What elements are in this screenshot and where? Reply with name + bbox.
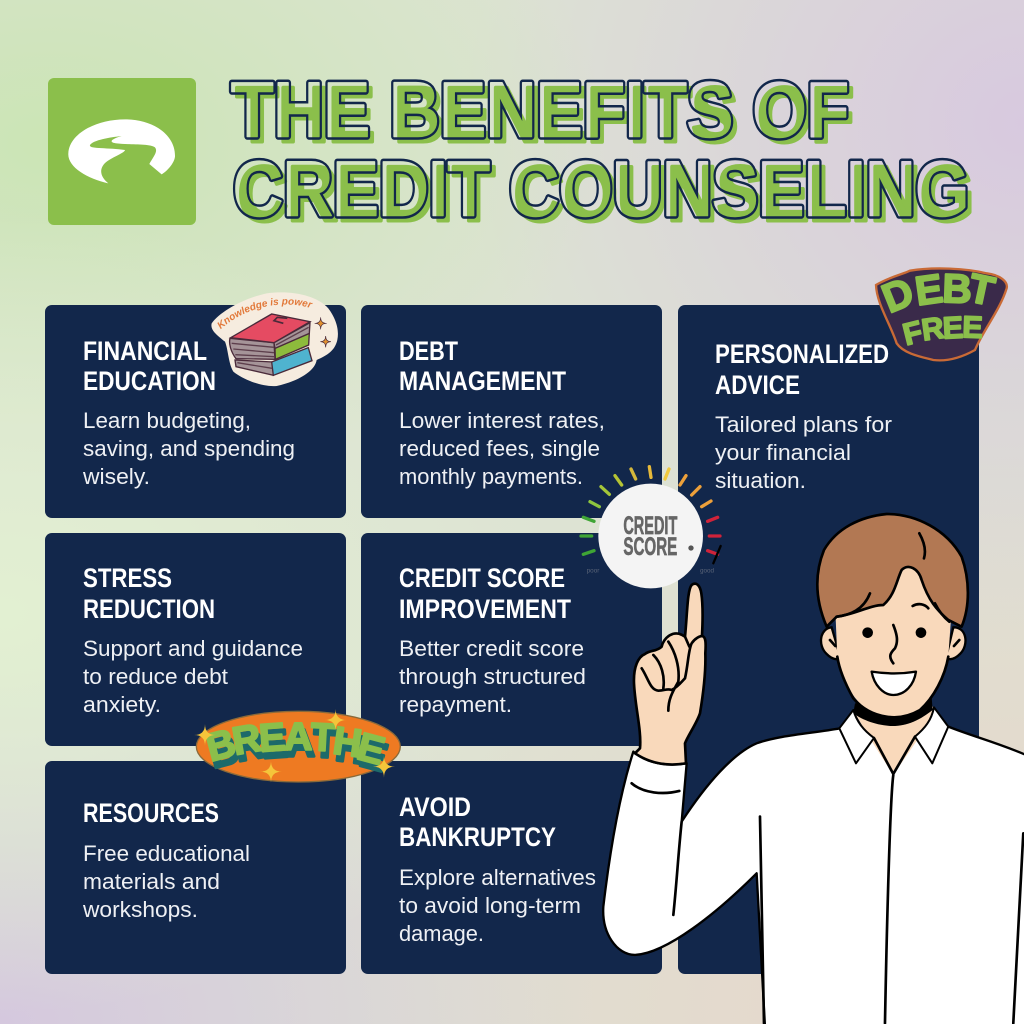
heading: avoid bankruptcy: BANKRUPTCY bbox=[399, 822, 556, 852]
body: credit score improvement: Better credit score bbox=[399, 636, 584, 661]
body: financial education: wisely. bbox=[82, 464, 150, 489]
neck shadow bbox=[853, 697, 933, 726]
mouth bbox=[872, 672, 916, 695]
heading: debt management: MANAGEMENT bbox=[399, 366, 566, 396]
ear lines bbox=[830, 640, 959, 646]
panel: stress reduction bbox=[45, 533, 346, 746]
shirt seams bbox=[632, 737, 1023, 1023]
heading: stress reduction bbox=[83, 563, 215, 624]
gauge: credit score badge: CREDIT bbox=[623, 513, 677, 540]
panel: resources bbox=[45, 761, 346, 974]
body: debt management: reduced fees, single bbox=[399, 436, 600, 461]
title bbox=[228, 78, 972, 224]
body: avoid bankruptcy: damage. bbox=[399, 921, 484, 946]
gauge: credit score badge: SCORE bbox=[623, 534, 677, 561]
body: personalized advice: your financial bbox=[715, 440, 851, 465]
heading: personalized advice: ADVICE bbox=[715, 370, 800, 400]
body: debt management: Lower interest rates, bbox=[399, 408, 605, 433]
body: credit score improvement: through structured bbox=[399, 664, 586, 689]
body: financial education: Learn budgeting, bbox=[83, 408, 251, 433]
hand bbox=[634, 584, 706, 765]
body: financial education bbox=[82, 408, 295, 489]
panel: avoid bankruptcy bbox=[361, 761, 662, 974]
panel: financial education bbox=[45, 305, 346, 518]
heading: financial education: FINANCIAL bbox=[83, 336, 207, 366]
gauge: credit score badge bbox=[581, 467, 721, 588]
shirt and raised arm bbox=[603, 727, 1024, 1024]
body: avoid bankruptcy: to avoid long-term bbox=[399, 893, 581, 918]
neck bbox=[855, 707, 933, 775]
sticker: breathe: BREATHE bbox=[202, 715, 389, 774]
gauge: credit score badge: good bbox=[700, 568, 715, 575]
heading: avoid bankruptcy: AVOID bbox=[399, 792, 471, 822]
sticker: debt free: FREE bbox=[899, 310, 983, 352]
heading: credit score improvement: CREDIT SCORE bbox=[399, 563, 565, 593]
hair strand bbox=[837, 533, 949, 622]
panel: credit score improvement bbox=[361, 533, 662, 746]
heading: stress reduction: STRESS bbox=[83, 563, 172, 593]
body: personalized advice bbox=[715, 412, 892, 493]
heading: financial education bbox=[83, 336, 216, 396]
body: resources: materials and bbox=[83, 869, 220, 894]
ears bbox=[821, 627, 965, 659]
face bbox=[833, 563, 955, 717]
sticker: knowledge is power books: Knowledge is power bbox=[217, 298, 313, 330]
body: avoid bankruptcy: Explore alternatives bbox=[399, 865, 596, 890]
body: debt management: monthly payments. bbox=[399, 464, 583, 489]
body: financial education: saving, and spending bbox=[83, 436, 295, 461]
heading: avoid bankruptcy bbox=[399, 792, 556, 852]
hair bbox=[817, 514, 968, 627]
jaw line bbox=[837, 657, 948, 717]
sticker: debt free: DEBT bbox=[875, 264, 999, 322]
sticker: debt free bbox=[875, 264, 1007, 360]
heading: personalized advice: PERSONALIZED bbox=[715, 339, 889, 369]
body: personalized advice: Tailored plans for bbox=[715, 412, 892, 437]
heading: credit score improvement: IMPROVEMENT bbox=[399, 594, 571, 624]
body: stress reduction: to reduce debt bbox=[83, 664, 228, 689]
heading: debt management: DEBT bbox=[399, 336, 458, 366]
eyes bbox=[862, 627, 926, 638]
body: resources: workshops. bbox=[82, 897, 198, 922]
sticker: knowledge is power books bbox=[211, 292, 338, 386]
body: credit score improvement: repayment. bbox=[399, 692, 512, 717]
body: resources bbox=[82, 841, 250, 922]
logo: green tile with white road emblem bbox=[48, 78, 196, 225]
collar bbox=[839, 707, 948, 763]
body: stress reduction: anxiety. bbox=[83, 692, 161, 717]
body: debt management bbox=[399, 408, 605, 489]
body: stress reduction: Support and guidance bbox=[83, 636, 303, 661]
heading: credit score improvement bbox=[399, 563, 571, 624]
heading: stress reduction: REDUCTION bbox=[83, 594, 215, 624]
heading: financial education: EDUCATION bbox=[83, 366, 216, 396]
body: credit score improvement bbox=[399, 636, 586, 717]
body: avoid bankruptcy bbox=[399, 865, 596, 946]
finger lines bbox=[642, 636, 702, 711]
body: resources: Free educational bbox=[83, 841, 250, 866]
title: THE BENEFITS OF bbox=[236, 70, 854, 158]
panel: personalized advice bbox=[678, 305, 979, 974]
body: stress reduction bbox=[83, 636, 303, 717]
eyebrow and nose bbox=[890, 604, 928, 663]
illustration: man pointing up bbox=[603, 514, 1024, 1024]
sticker: breathe: BREATHE bbox=[204, 722, 392, 780]
heading: debt management bbox=[399, 336, 566, 396]
panel: debt management bbox=[361, 305, 662, 518]
body: personalized advice: situation. bbox=[715, 468, 806, 493]
heading: resources: RESOURCES bbox=[83, 798, 219, 828]
gauge: credit score badge: poor bbox=[587, 568, 599, 575]
heading: personalized advice bbox=[715, 339, 889, 400]
